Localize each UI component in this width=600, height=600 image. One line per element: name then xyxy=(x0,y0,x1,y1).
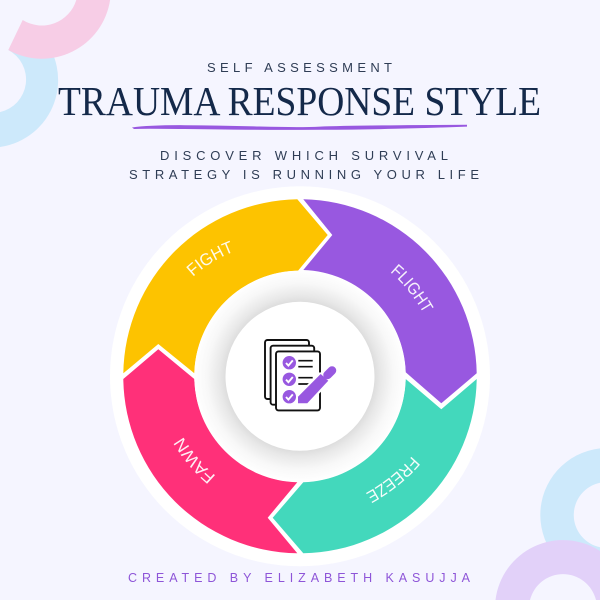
segment: flight xyxy=(303,199,477,404)
label: fawn: FAWN xyxy=(174,438,215,484)
cycle diagram xyxy=(110,186,490,566)
decoration: top-left pink ring xyxy=(8,0,110,59)
credit line: CREATED BY ELIZABETH KASUJJA xyxy=(128,571,471,585)
brush underline xyxy=(132,125,467,130)
title: TRAUMA RESPONSE STYLE xyxy=(58,78,541,124)
eyebrow: self assessment: SELF ASSESSMENT xyxy=(207,60,392,75)
segment: fight xyxy=(123,199,328,374)
segment: fawn xyxy=(123,349,298,554)
decoration: bottom-right purple ring xyxy=(496,540,600,600)
outer white disc xyxy=(110,186,490,566)
label: fight: FIGHT xyxy=(186,240,230,276)
subtitle line 2: STRATEGY IS RUNNING YOUR LIFE xyxy=(129,167,479,182)
center hub xyxy=(226,302,374,451)
decoration: top-left blue ring xyxy=(0,34,58,147)
decoration: bottom-right blue ring xyxy=(540,448,600,582)
segment: freeze xyxy=(272,379,477,554)
icon: checklist with pen xyxy=(265,340,332,410)
label: freeze: FREEZE xyxy=(366,456,420,503)
label: flight: FLIGHT xyxy=(391,264,434,310)
subtitle line 1: DISCOVER WHICH SURVIVAL xyxy=(160,148,448,163)
center hub shadow xyxy=(194,271,406,482)
subtitle xyxy=(129,148,479,182)
